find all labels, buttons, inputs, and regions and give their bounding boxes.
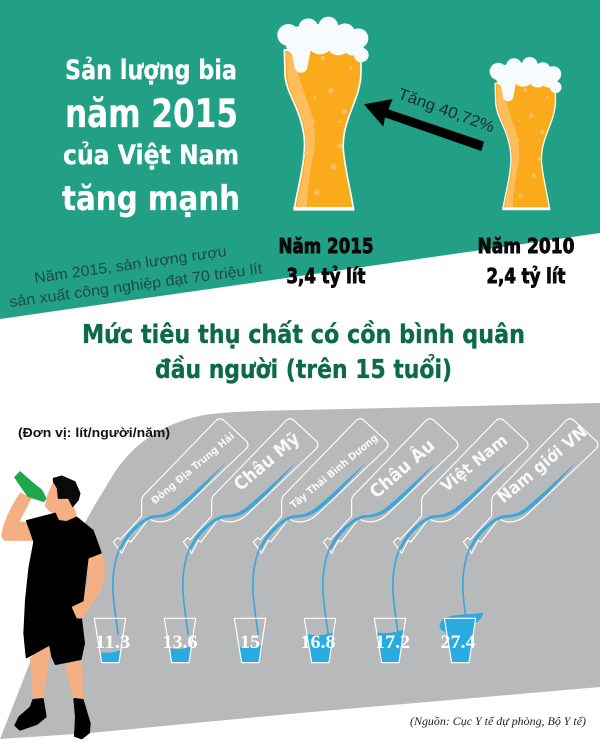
label: 2010 volume: 2,4 tỷ lít — [486, 264, 566, 288]
bottle: Châu Mỹ 13.6 — [162, 419, 318, 663]
bottle: Nam giới VN 27.4: Nam giới VN — [494, 422, 591, 508]
bottle: Việt Nam 17.2 — [374, 419, 528, 663]
bottle: Việt Nam 17.2: 17.2 — [375, 632, 410, 653]
label: increase percentage: Tăng 40,72% — [396, 86, 496, 136]
panel: gray chart background — [0, 403, 600, 739]
chart: bottles pouring into glasses — [94, 419, 598, 663]
bottle: Đông Địa Trung Hải 11.3: 11.3 — [95, 632, 130, 653]
heading: alcohol consumption per capita — [82, 319, 525, 385]
label: 2015 volume: Năm 2015 — [278, 234, 374, 258]
text block: spirits production note: sản xuất công nghiệp đạt 70 triệu lít — [8, 260, 264, 311]
label: 2015 volume — [278, 234, 374, 288]
bottle: Đông Địa Trung Hải 11.3: Đông Địa Trung Hải — [149, 430, 237, 507]
icon: beer glass 2015 — [277, 17, 369, 211]
text block: spirits production note: Năm 2015, sản lượng rượu — [33, 243, 228, 287]
label: unit: (Đơn vị: lít/người/năm) — [18, 425, 170, 440]
bottle: Tây Thái Bình Dương 15 — [234, 419, 388, 663]
left leg — [31, 643, 49, 700]
heading: alcohol consumption per capita: Mức tiêu thụ chất có cồn bình quân — [82, 319, 525, 350]
icon: man drinking from a bottle — [2, 472, 104, 738]
left shoe — [15, 699, 46, 730]
bottle: Tây Thái Bình Dương 15: 15 — [240, 632, 260, 653]
bottle: Việt Nam 17.2: Việt Nam — [437, 430, 511, 496]
shirt and shorts — [24, 514, 101, 664]
forearm and hand — [2, 493, 35, 540]
hand on hip — [73, 601, 94, 618]
title: của Việt Nam — [63, 140, 239, 171]
title — [62, 55, 240, 219]
title: năm 2015 — [65, 92, 238, 137]
label: 2010 volume — [478, 234, 574, 288]
panel: green header background — [0, 0, 600, 319]
label: 2015 volume: 3,4 tỷ lít — [286, 264, 366, 288]
face and neck — [46, 479, 77, 521]
icon: beer glass 2010 — [490, 57, 561, 210]
bottle: Nam giới VN 27.4: 27.4 — [440, 632, 476, 653]
bottle: Châu Âu 16.8 — [300, 419, 458, 663]
right shoe — [74, 699, 90, 738]
source note: (Nguồn: Cục Y tế dự phòng, Bộ Y tế) — [410, 714, 586, 728]
arrow: growth from 2010 to 2015 — [364, 99, 484, 151]
bottle: Châu Mỹ 13.6: Châu Mỹ — [230, 428, 304, 495]
bottle: Châu Mỹ 13.6: 13.6 — [162, 632, 198, 653]
bottle: Châu Âu 16.8: Châu Âu — [365, 434, 439, 503]
bottle: Tây Thái Bình Dương 15: Tây Thái Bình Dương — [288, 432, 380, 511]
bottle: Nam giới VN 27.4 — [440, 419, 598, 663]
hair — [53, 476, 80, 507]
label: 2010 volume: Năm 2010 — [478, 234, 574, 258]
text block: spirits production note — [8, 243, 264, 311]
title: tăng mạnh — [62, 179, 240, 219]
bottle: Châu Âu 16.8: 16.8 — [300, 632, 336, 653]
green bottle — [15, 472, 46, 502]
right arm — [73, 553, 104, 618]
heading: alcohol consumption per capita: đầu người (trên 15 tuổi) — [155, 352, 452, 385]
bottle: Đông Địa Trung Hải 11.3 — [94, 419, 248, 663]
right leg — [66, 660, 83, 699]
title: Sản lượng bia — [65, 55, 237, 86]
